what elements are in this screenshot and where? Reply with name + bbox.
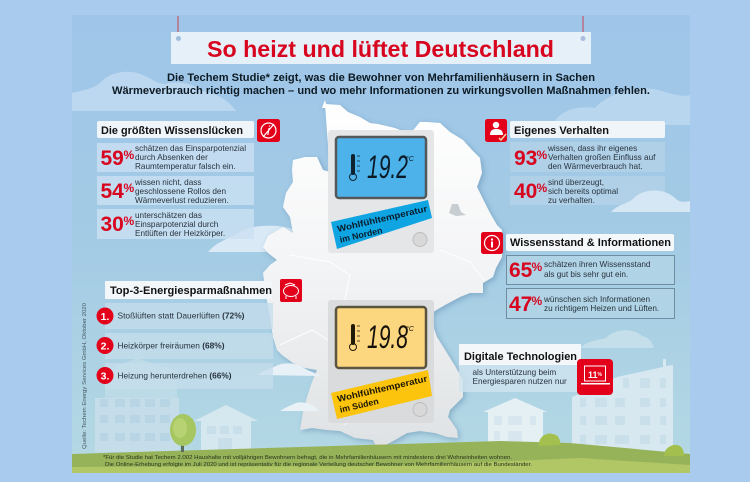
item 3: 3. (101, 370, 109, 382)
stat 40: % (536, 181, 548, 195)
display: °C (406, 325, 415, 333)
stat 59: durch Absenken der (135, 153, 208, 162)
intro text (112, 72, 650, 97)
stat 93 (510, 142, 665, 172)
stat 65: als gut bis sehr gut ein. (544, 270, 628, 279)
cloud: lower right (580, 330, 654, 348)
heading: Top-3-Energiesparmaßnahmen (110, 285, 272, 297)
house: right (483, 398, 547, 452)
title band: So heizt und lüftet Deutschland (207, 36, 554, 62)
footnote: Die Online-Erhebung erfolgte im Juli 2020 und ist repräsentativ für die regionale Verteilung deutscher Bewohner von Mehrfamilienhäusern auf die Bundesländer. (105, 462, 532, 468)
stat 65: % (532, 260, 542, 274)
stat 54: % (124, 181, 134, 195)
stat 47: wünschen sich Informationen (543, 295, 650, 304)
cloud: left middle (208, 226, 300, 252)
stat 54: 54 (100, 180, 124, 203)
stat 93: den Wärmeverbrauch hat. (548, 162, 643, 171)
panel: Die größten Wissenslücken (97, 119, 280, 239)
map: Berlin (449, 204, 466, 216)
panel: Digitale Technologien (459, 344, 613, 395)
description: Energiesparen nutzen nur (472, 377, 567, 386)
buildings: right (572, 359, 673, 452)
stat 59 (97, 143, 254, 172)
stat 30: 30 (100, 213, 124, 236)
cloud: map lower left (257, 363, 320, 376)
bushes (539, 434, 684, 456)
stat 65: schätzen ihren Wissensstand (544, 260, 651, 269)
heading (97, 121, 254, 138)
intro text: Wärmeverbrauch richtig machen – und wo mehr Informationen zu wirkungsvollen Maßnahmen fehlen. (112, 85, 650, 97)
stat 59: schätzen das Einsparpotenzial (135, 144, 246, 153)
label: north: Wohlfühltemperatur (336, 203, 429, 234)
heading (105, 281, 272, 299)
icon: laptop 11% (577, 359, 613, 395)
title pins (178, 16, 584, 37)
stat 40 (510, 176, 665, 205)
item 1: Stoßlüften statt Dauerlüften (72%) (118, 312, 245, 320)
stat 93: 93 (514, 147, 537, 170)
stat 54: geschlossene Rollos den (135, 187, 226, 196)
icon: laptop 11%: % (598, 372, 603, 378)
icon: info (481, 232, 503, 254)
description: als Unterstützung beim (472, 368, 556, 377)
item 2 (96, 333, 273, 359)
house: left (194, 405, 258, 452)
stat 40: zu verhalten. (548, 196, 595, 205)
item 3 (96, 363, 273, 389)
label: south: im Süden (339, 396, 380, 415)
display: °C (406, 155, 415, 163)
stat 40: 40 (514, 180, 537, 203)
heading (510, 121, 665, 138)
stat 47: zu richtigem Heizen und Lüften. (544, 304, 659, 313)
display (336, 137, 426, 198)
display: 19.2 (367, 149, 408, 185)
thermostat: south (328, 300, 434, 423)
label: north (331, 200, 432, 249)
button (413, 402, 427, 416)
display: 19.8 (367, 319, 408, 355)
heading: Wissensstand & Informationen (510, 237, 671, 249)
stat 30 (97, 209, 254, 239)
stat 54 (97, 176, 254, 205)
stat 47: % (532, 294, 542, 308)
label: north: im Norden (339, 225, 383, 245)
stat 47 (506, 288, 674, 318)
stat 47: 47 (509, 293, 532, 316)
description (459, 365, 583, 392)
stat 30: unterschätzen das (135, 211, 202, 220)
footnote: *Für die Studie hat Techem 2.002 Haushalte mit volljährigen Bewohnern befragt, die in Mehrfamilienhäusern mit mindestens drei Wohneinheiten wohnen. (103, 455, 512, 461)
footnote (103, 455, 532, 468)
icon: no knowledge: i (267, 123, 271, 138)
tree (170, 414, 196, 452)
thermostat: north (328, 130, 434, 253)
icon: no knowledge (257, 119, 280, 142)
item 2: Heizkörper freiräumen (68%) (118, 342, 225, 350)
heading: Eigenes Verhalten (514, 125, 609, 137)
panel: Top-3-Energiesparmaßnahmen (96, 279, 302, 389)
heading (459, 344, 581, 365)
stat 54: wissen nicht, dass (134, 178, 201, 187)
stat 40: sich bereits optimal (548, 187, 618, 196)
title band (171, 32, 591, 64)
display (336, 307, 426, 368)
label: south (331, 370, 432, 419)
heading: Digitale Technologien (464, 351, 577, 363)
icon: person with check (485, 119, 507, 142)
stat 30: Einsparpotenzial durch (135, 220, 219, 229)
stat 30: % (124, 214, 134, 228)
stat 65: 65 (509, 259, 533, 282)
item 2: 2. (101, 340, 109, 352)
buildings: left (95, 358, 179, 452)
panel: Wissensstand & Informationen (481, 232, 674, 318)
icon: piggy bank (280, 279, 302, 302)
stat 54: Wärmeverlust reduzieren. (135, 196, 229, 205)
stat 59: % (124, 148, 134, 162)
stat 40: sind überzeugt, (548, 178, 604, 187)
item 3: Heizung herunterdrehen (66%) (118, 372, 232, 380)
map of Germany (263, 100, 503, 448)
ground (72, 441, 690, 473)
heading (506, 234, 674, 251)
heading: Die größten Wissenslücken (101, 125, 243, 137)
stat 93: wissen, dass ihr eigenes (547, 144, 637, 153)
cloud: top left (72, 72, 236, 111)
stat 93: % (536, 148, 548, 162)
label: south: Wohlfühltemperatur (336, 373, 429, 404)
stat 65 (506, 256, 674, 284)
state borders (280, 250, 484, 425)
stat 59: 59 (100, 147, 124, 170)
intro text: Die Techem Studie* zeigt, was die Bewohner von Mehrfamilienhäusern in Sachen (167, 72, 595, 84)
background panel (72, 15, 690, 473)
item 1: 1. (101, 311, 109, 323)
stat 59: Raumtemperatur falsch ein. (135, 162, 236, 171)
panel: Eigenes Verhalten (485, 119, 665, 205)
button (413, 232, 427, 246)
icon: laptop 11%: 11 (588, 370, 598, 380)
cloud: top right (553, 88, 690, 125)
stat 93: Verhalten großen Einfluss auf (548, 153, 656, 162)
stat 30: Entlüften der Heizkörper. (135, 229, 225, 238)
cloud: over Eigenes Verhalten (611, 190, 690, 212)
item 1 (96, 303, 273, 329)
source note: Quelle: Techem Energy Services GmbH, Oktober 2020 (82, 303, 88, 449)
cloud: small lower (280, 402, 320, 411)
